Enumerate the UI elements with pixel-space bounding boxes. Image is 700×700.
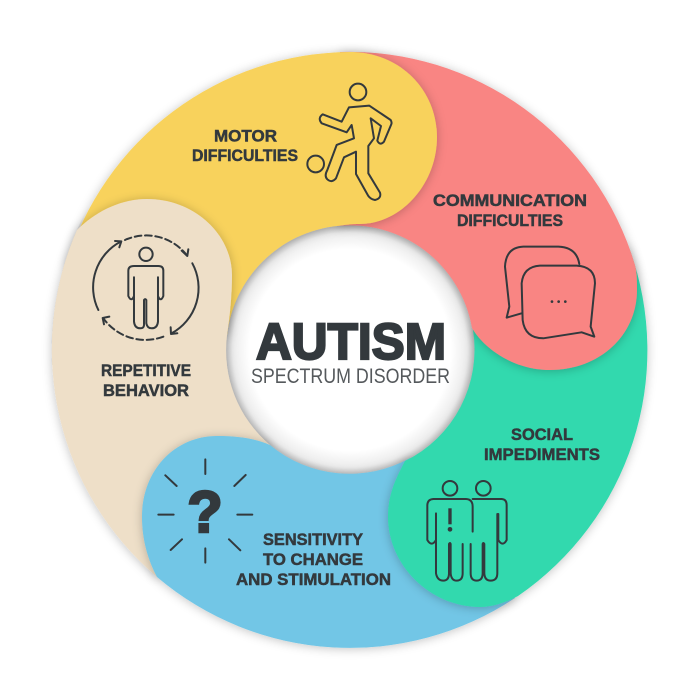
label: social impediments (484, 426, 600, 464)
label: communication difficulties: DIFFICULTIES (457, 212, 563, 230)
label: motor difficulties: DIFFICULTIES (192, 147, 298, 165)
label: sensitivity to change and stimulation: SENSITIVITY (263, 531, 363, 549)
panel: motor difficulties (66, 52, 437, 335)
title: autism: AUTISM (256, 313, 446, 370)
label: sensitivity to change and stimulation: AND STIMULATION (236, 571, 391, 589)
panel: sensitivity to change and stimulation (142, 436, 515, 648)
label: social impediments: SOCIAL (511, 426, 573, 444)
icon: person with cycle arrows (93, 235, 199, 340)
subtitle: spectrum disorder: SPECTRUM DISORDER (251, 365, 450, 388)
icon: running figure with ball (307, 84, 392, 200)
center hole background (215, 215, 485, 485)
label: communication difficulties (433, 192, 587, 230)
icon: two people with exclamation (427, 481, 507, 581)
label: repetitive behavior (101, 362, 191, 400)
panel: social impediments (388, 245, 647, 607)
panel: repetitive behavior lower part (52, 199, 270, 577)
label: repetitive behavior: BEHAVIOR (103, 382, 189, 400)
label: social impediments: IMPEDIMENTS (484, 446, 600, 464)
label: communication difficulties: COMMUNICATION (433, 192, 587, 210)
label: sensitivity to change and stimulation: TO CHANGE (263, 551, 363, 569)
icon: question mark with rays (158, 459, 252, 563)
label: sensitivity to change and stimulation (236, 531, 391, 589)
panel: repetitive behavior (52, 195, 237, 365)
icon: speech bubbles (505, 247, 595, 338)
label: motor difficulties: MOTOR (214, 128, 277, 146)
label: motor difficulties (192, 128, 298, 165)
panel: communication difficulties (337, 52, 637, 370)
label: repetitive behavior: REPETITIVE (101, 362, 191, 380)
icon: question mark with rays: ? (187, 480, 223, 545)
